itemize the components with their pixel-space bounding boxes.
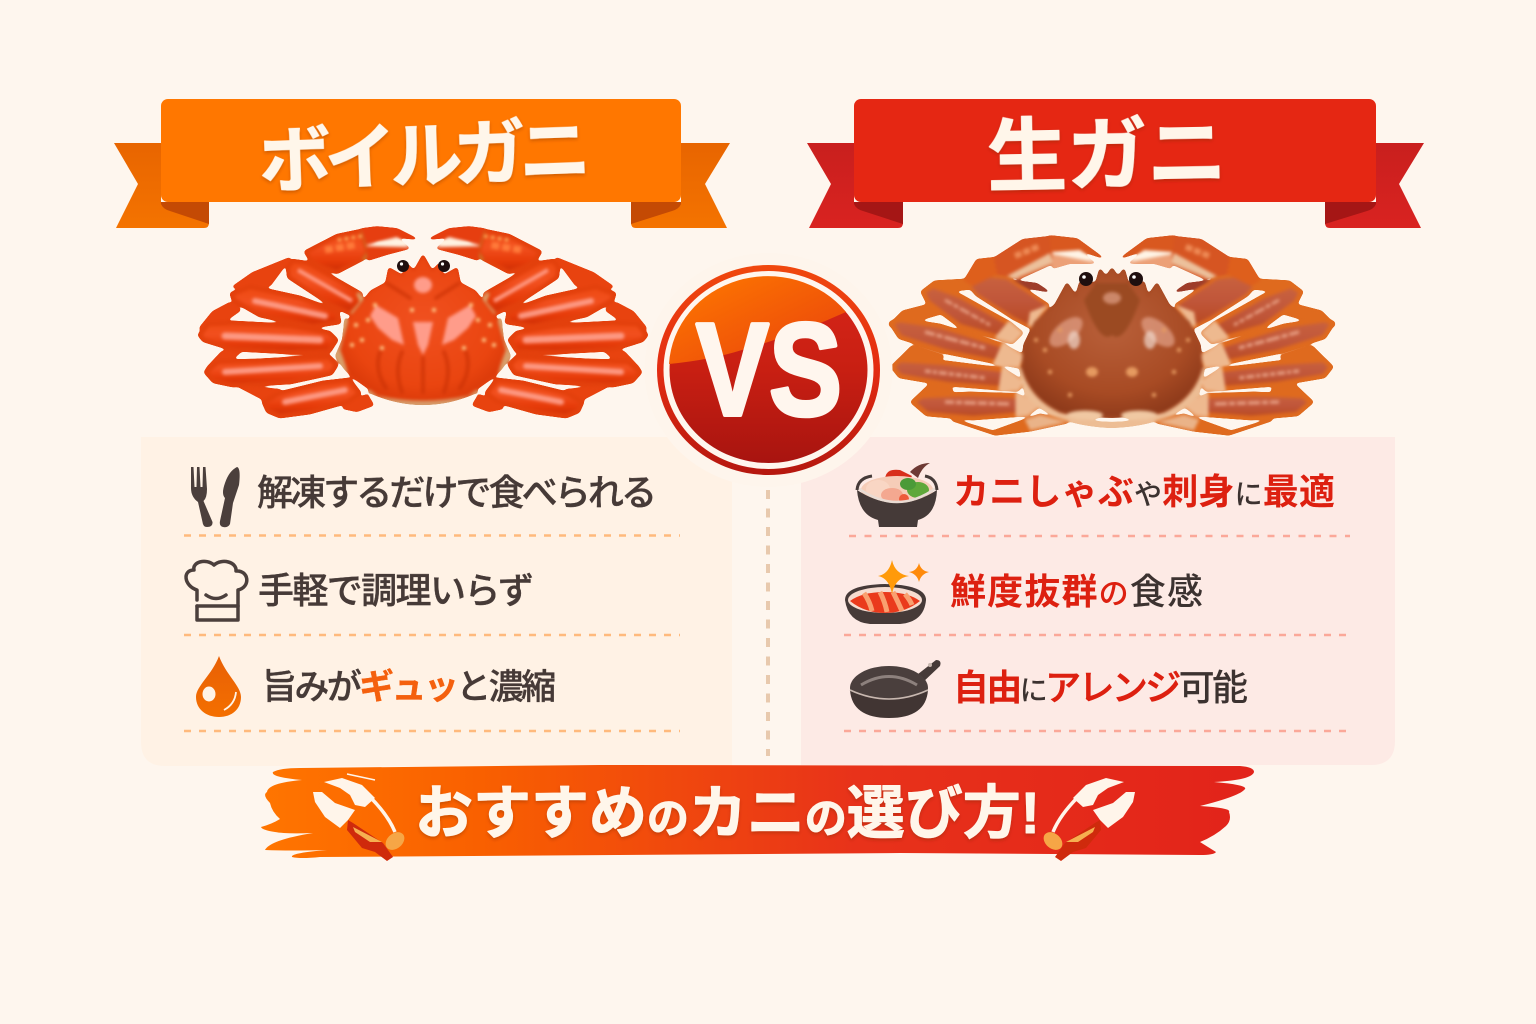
VS lettering: VS (696, 296, 842, 443)
text: 旨みがギュッと濃縮: 旨みがギュッと濃縮 (262, 668, 556, 707)
text: 解凍するだけで食べられる: 解凍するだけで食べられる (257, 472, 657, 513)
icon: drop (196, 656, 241, 717)
text: 手軽で調理いらず: 手軽で調理いらず (258, 570, 534, 611)
center dashed divider (766, 490, 770, 756)
text: 鮮度抜群の食感: 鮮度抜群の食感 (950, 571, 1203, 612)
illustration: raw crab (890, 236, 1334, 434)
icon: frying pan (850, 660, 940, 718)
banner title: おすすめのカニの選び方! (415, 781, 1040, 846)
text: カニしゃぶや刺身に最適: カニしゃぶや刺身に最適 (953, 471, 1335, 512)
left column panel (141, 437, 732, 766)
illustration: boiled crab (200, 227, 646, 416)
ribbon: ボイルガニ (114, 99, 730, 228)
text: 自由にアレンジ可能: 自由にアレンジ可能 (953, 667, 1248, 708)
icon: chef hat (186, 561, 247, 620)
VS badge (644, 253, 892, 487)
icon: crab shabu bowl (857, 463, 937, 527)
ribbon: 生ガニ (807, 99, 1424, 228)
icon: fork and knife (191, 467, 240, 527)
right column panel (801, 437, 1395, 765)
icon: right claw (1040, 778, 1135, 861)
ribbon title: 生ガニ: 生ガニ (986, 109, 1228, 202)
ribbon title: ボイルガニ: ボイルガニ (258, 111, 592, 203)
brush banner: おすすめのカニの選び方! (261, 765, 1254, 861)
icon: left claw (313, 774, 408, 861)
icon: sashimi plate with sparkles (845, 560, 929, 624)
